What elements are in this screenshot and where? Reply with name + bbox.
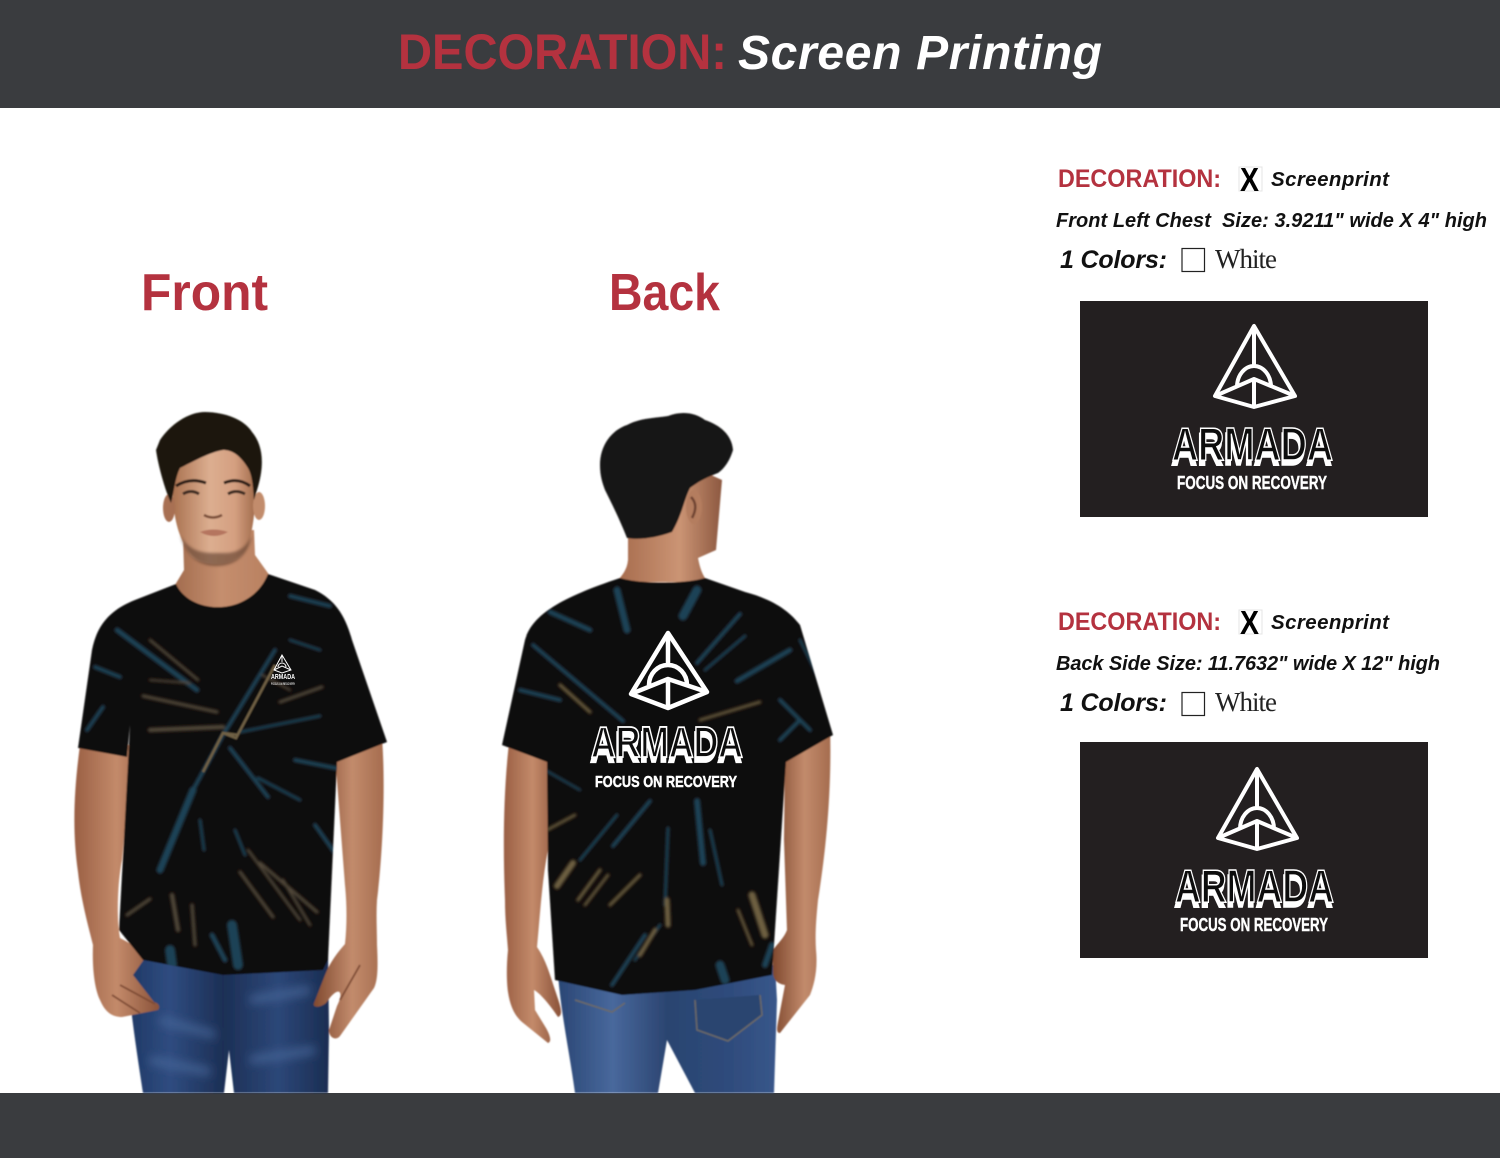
- decoration type: Screenprint: [1271, 168, 1390, 191]
- jeans: [125, 950, 329, 1093]
- hair: [600, 413, 733, 539]
- neck: [616, 470, 722, 582]
- spec panel: back: [1056, 604, 1440, 958]
- photo: front model: [74, 412, 387, 1093]
- shirt: [78, 574, 387, 975]
- shirt: [502, 578, 833, 995]
- title: Screen Printing: [738, 27, 1102, 80]
- tie-dye rays: [520, 590, 830, 985]
- size text: Front Left Chest Size: 3.9211" wide X 4" high: [1056, 210, 1487, 232]
- artwork: front: ARMADA: [1172, 418, 1333, 470]
- tagline: FOCUS ON RECOVERY: [595, 774, 737, 791]
- decoration type: [1058, 604, 1390, 641]
- colors: [1060, 244, 1277, 274]
- decoration type: X: [1240, 161, 1259, 198]
- spec panel: front: [1056, 161, 1487, 517]
- decoration type: [1058, 161, 1390, 198]
- small chest logo: ARMADA: [271, 672, 295, 681]
- tie-dye centre: [203, 665, 275, 772]
- tie-dye rays: [87, 596, 345, 965]
- right arm and hand: [314, 738, 384, 1038]
- heading: Back: Back: [609, 264, 720, 322]
- title: DECORATION:: [398, 24, 727, 80]
- artwork: back: ARMADA: [1175, 860, 1334, 912]
- back print logo: [591, 633, 743, 791]
- artwork: back: [1080, 742, 1428, 958]
- footer bar: [0, 1093, 1500, 1158]
- colors: White: [1215, 687, 1277, 717]
- colors: 1 Colors:: [1060, 689, 1167, 717]
- right arm and hand: [773, 725, 830, 1033]
- ears: [163, 494, 175, 522]
- artwork: front: FOCUS ON RECOVERY: [1177, 473, 1327, 493]
- size text: Back Side Size: 11.7632" wide X 12" high: [1056, 653, 1440, 675]
- artwork: back: FOCUS ON RECOVERY: [1180, 915, 1328, 935]
- heading: Front: Front: [141, 264, 268, 322]
- neck: [172, 530, 270, 611]
- decoration type: Screenprint: [1271, 611, 1390, 634]
- colors: White: [1215, 244, 1277, 274]
- small chest logo: [271, 655, 295, 686]
- colors: [1060, 687, 1277, 717]
- eyes and brows: [176, 481, 250, 486]
- nose and mouth: [204, 515, 222, 518]
- decoration type: X: [1240, 604, 1259, 641]
- left arm and hand: [74, 745, 159, 1017]
- hair: [156, 412, 262, 503]
- left arm and hand: [504, 735, 561, 1043]
- head: [172, 448, 256, 564]
- decoration type: DECORATION:: [1058, 165, 1221, 193]
- decoration type: DECORATION:: [1058, 608, 1221, 636]
- ear: [686, 490, 702, 524]
- header bar: [0, 0, 1500, 108]
- photo: back model: [502, 413, 833, 1093]
- logo mark: [631, 633, 707, 708]
- stubble: [180, 535, 252, 566]
- colors: 1 Colors:: [1060, 246, 1167, 274]
- artwork: front: [1080, 301, 1428, 517]
- finger lines: [112, 965, 360, 1013]
- small chest logo: FOCUS ON RECOVERY: [271, 681, 295, 686]
- jeans: [558, 965, 777, 1093]
- title: [398, 24, 1102, 80]
- wordmark: ARMADA: [591, 718, 743, 767]
